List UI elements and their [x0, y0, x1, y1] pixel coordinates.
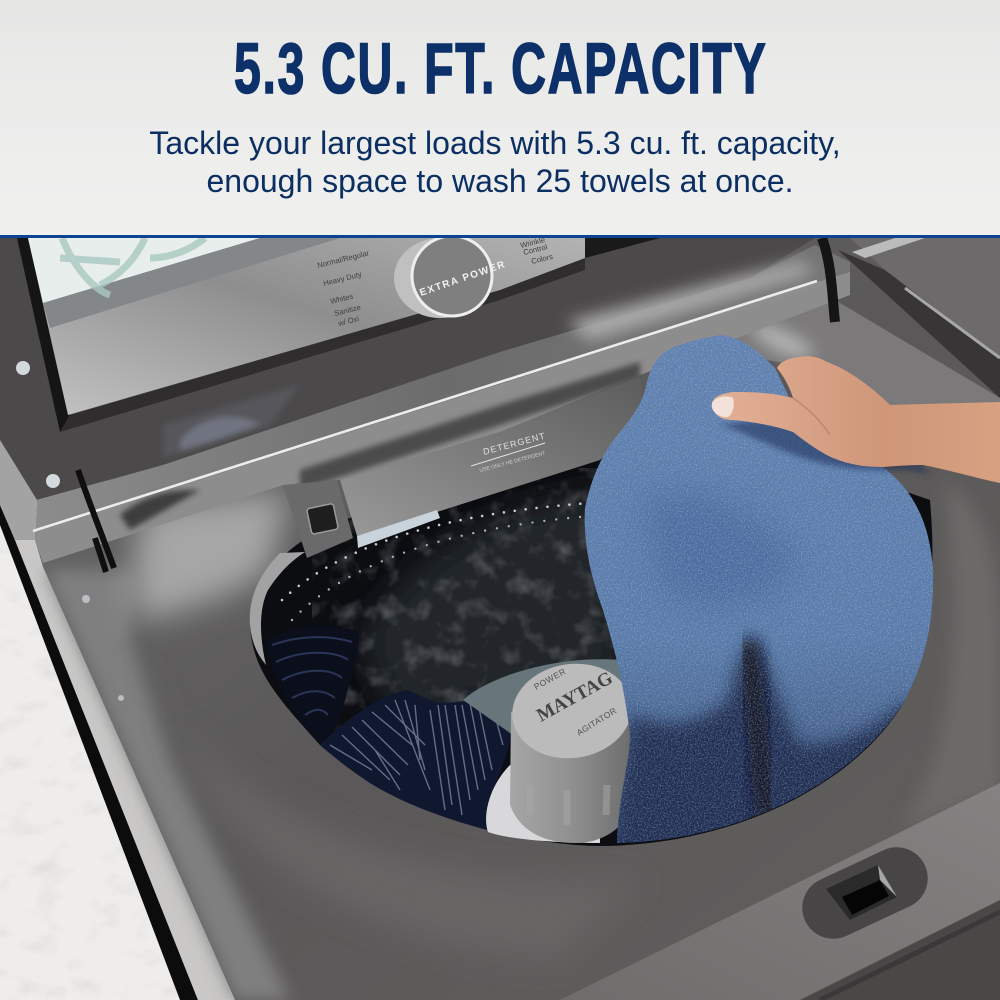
striped navy laundry: [320, 690, 510, 830]
photo: washer interior with towel: [0, 238, 1000, 1000]
detergent dispenser: USE ONLY HE DETERGENT: [479, 450, 547, 474]
cycle labels: Wrinkle: [519, 235, 546, 250]
control panel dial: [394, 236, 508, 318]
agitator text: POWER: [532, 666, 568, 692]
cycle labels: Whites: [329, 292, 354, 306]
open lid frame: [0, 238, 815, 500]
black left cord: [78, 470, 114, 572]
washer top deck: [35, 238, 1000, 1000]
blue towel: [584, 335, 934, 843]
control panel dial: EXTRA POWER: [418, 259, 508, 299]
agitator: [506, 656, 638, 843]
hand and forearm: [712, 356, 1000, 483]
cycle labels: Heavy Duty: [322, 270, 363, 288]
cycle labels: Colors: [530, 252, 554, 266]
hinge strap: [822, 238, 835, 322]
right lid recess: [838, 238, 1000, 398]
lower left lid corner silver: [0, 430, 37, 540]
subtitle: Tackle your largest loads with 5.3 cu. ft. capacity,: [149, 125, 841, 161]
washer cabinet black edge: [0, 505, 198, 1000]
cycle labels: Normal/Regular: [316, 248, 371, 270]
agitator text: AGITATOR: [575, 705, 618, 738]
cycle labels: w/ Oxi: [336, 314, 360, 328]
agitator text: MAYTAG: [533, 667, 617, 726]
lid latch: [792, 837, 938, 949]
dark laundry in drum: [266, 626, 359, 745]
deck screws: [82, 595, 124, 701]
cycle labels: Sanitize: [333, 303, 362, 318]
cabinet light side strip: [15, 540, 235, 1000]
cycle labels: Control: [522, 242, 549, 257]
tub opening: [250, 458, 932, 846]
title: 5.3 CU. FT. CAPACITY: [234, 29, 766, 108]
detergent dispenser: [283, 376, 645, 558]
detergent dispenser: DETERGENT: [482, 431, 547, 457]
lid screws: [16, 361, 60, 488]
steel hinge bar: [33, 245, 850, 563]
marble countertop: [0, 238, 1000, 1000]
header panel: [0, 0, 1000, 238]
cycle labels: [316, 235, 554, 328]
subtitle: enough space to wash 25 towels at once.: [206, 163, 794, 199]
front panel band: [560, 783, 1000, 1000]
subtitle: [149, 125, 841, 199]
agitator base plate: [463, 659, 625, 843]
deck shading and highlights: [45, 300, 1000, 1000]
